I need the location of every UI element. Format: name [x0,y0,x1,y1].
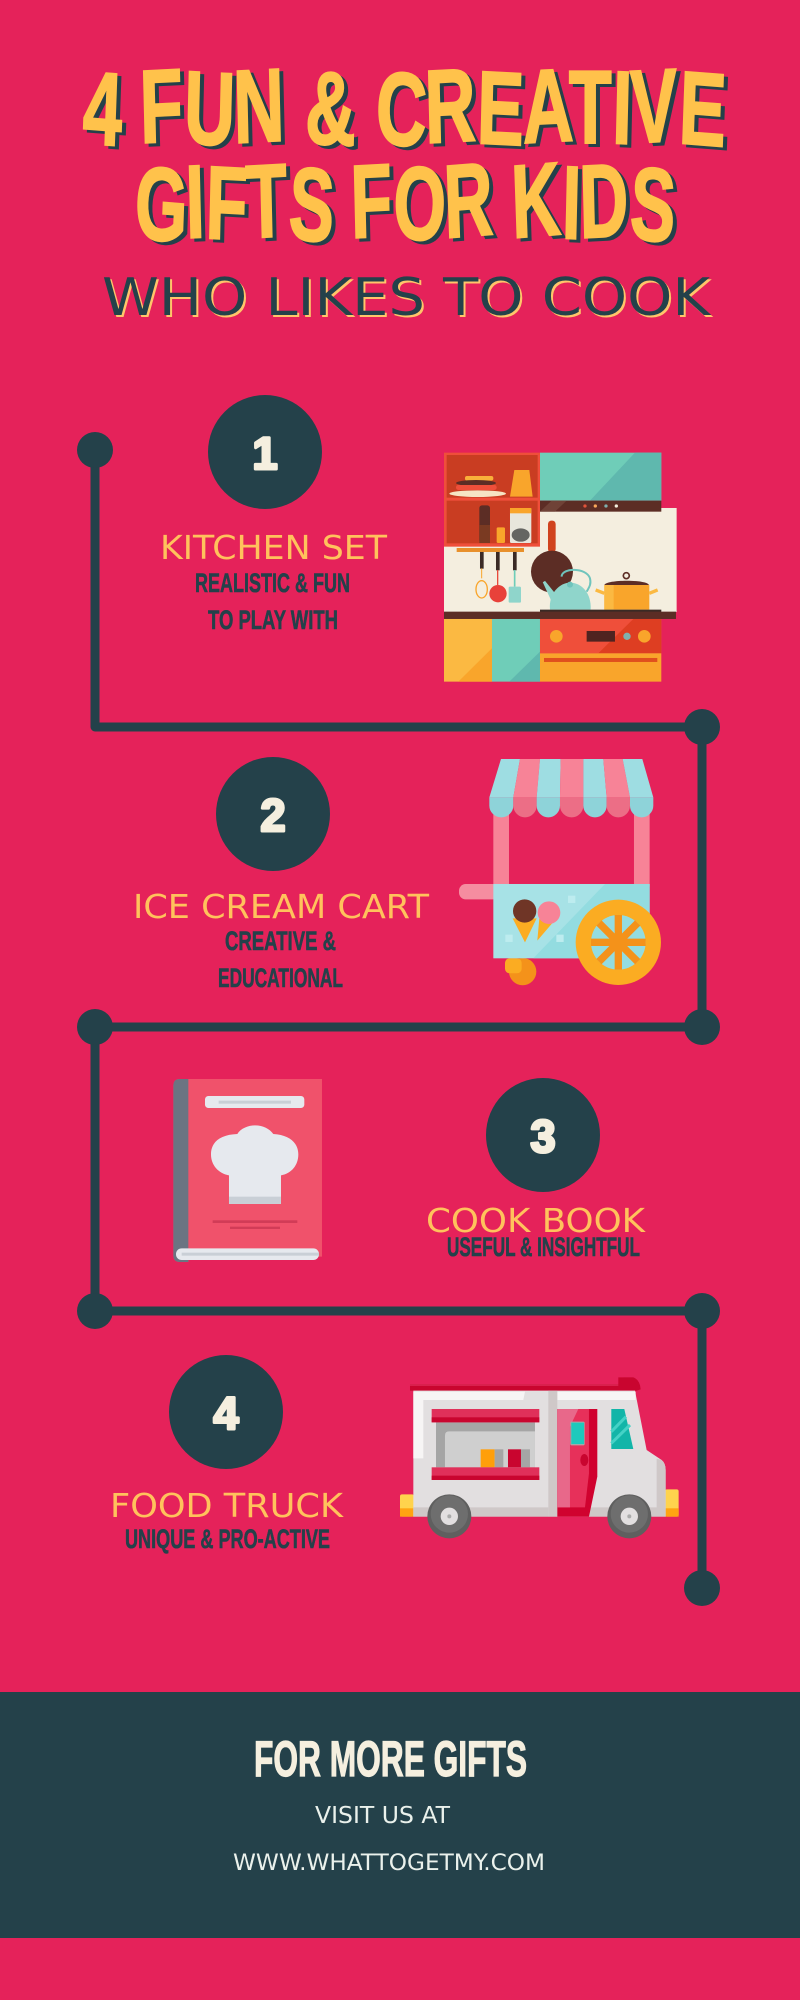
panel: step 2 ice cream cart [133,757,430,993]
description: ice cream cart: CREATIVE & [225,926,336,956]
number badge 2 [216,757,330,871]
description: cook book: USEFUL & INSIGHTFUL [447,1232,640,1262]
footer heading: FOR MORE GIFTS [254,1731,527,1787]
description: ice cream cart [218,926,343,993]
heading: food truck: FOOD TRUCK [110,1486,344,1525]
number badge 4 [169,1355,283,1469]
connector path with dots [77,432,720,1606]
description: kitchen set: TO PLAY WITH [208,605,338,635]
title: 4 FUN & CREATIVE [81,48,730,169]
description: food truck: UNIQUE & PRO-ACTIVE [125,1524,330,1554]
panel: step 1 kitchen set [160,395,388,635]
heading: ice cream cart: ICE CREAM CART [133,887,430,926]
heading: cook book: COOK BOOK [426,1201,646,1240]
footer line: visit us at: VISIT US AT [315,1803,451,1829]
description: ice cream cart: EDUCATIONAL [218,963,343,993]
icon: ice cream cart [459,759,661,985]
footer line: website: WWW.WHATTOGETMY.COM [233,1851,545,1876]
description: kitchen set [195,568,350,635]
subtitle: WHO LIKES TO COOK [104,270,714,330]
number badge 3 [486,1078,600,1192]
number badge 1 [208,395,322,509]
number badge 2: 2 [260,790,286,841]
icon: cook book [173,1079,322,1262]
subtitle: WHO LIKES TO COOK [102,268,712,328]
heading: kitchen set: KITCHEN SET [160,528,388,567]
panel: step 3 cook book [426,1078,646,1262]
footer band [0,1692,800,1938]
icon: food truck [400,1377,679,1538]
number badge 4: 4 [213,1388,239,1439]
panel: step 4 food truck [110,1355,344,1554]
number badge 1: 1 [252,428,278,479]
number badge 3: 3 [530,1111,556,1162]
title: GIFTS FOR KIDS [133,143,680,264]
description: kitchen set: REALISTIC & FUN [195,568,350,598]
icon: kitchen [444,453,677,682]
title [81,48,730,264]
